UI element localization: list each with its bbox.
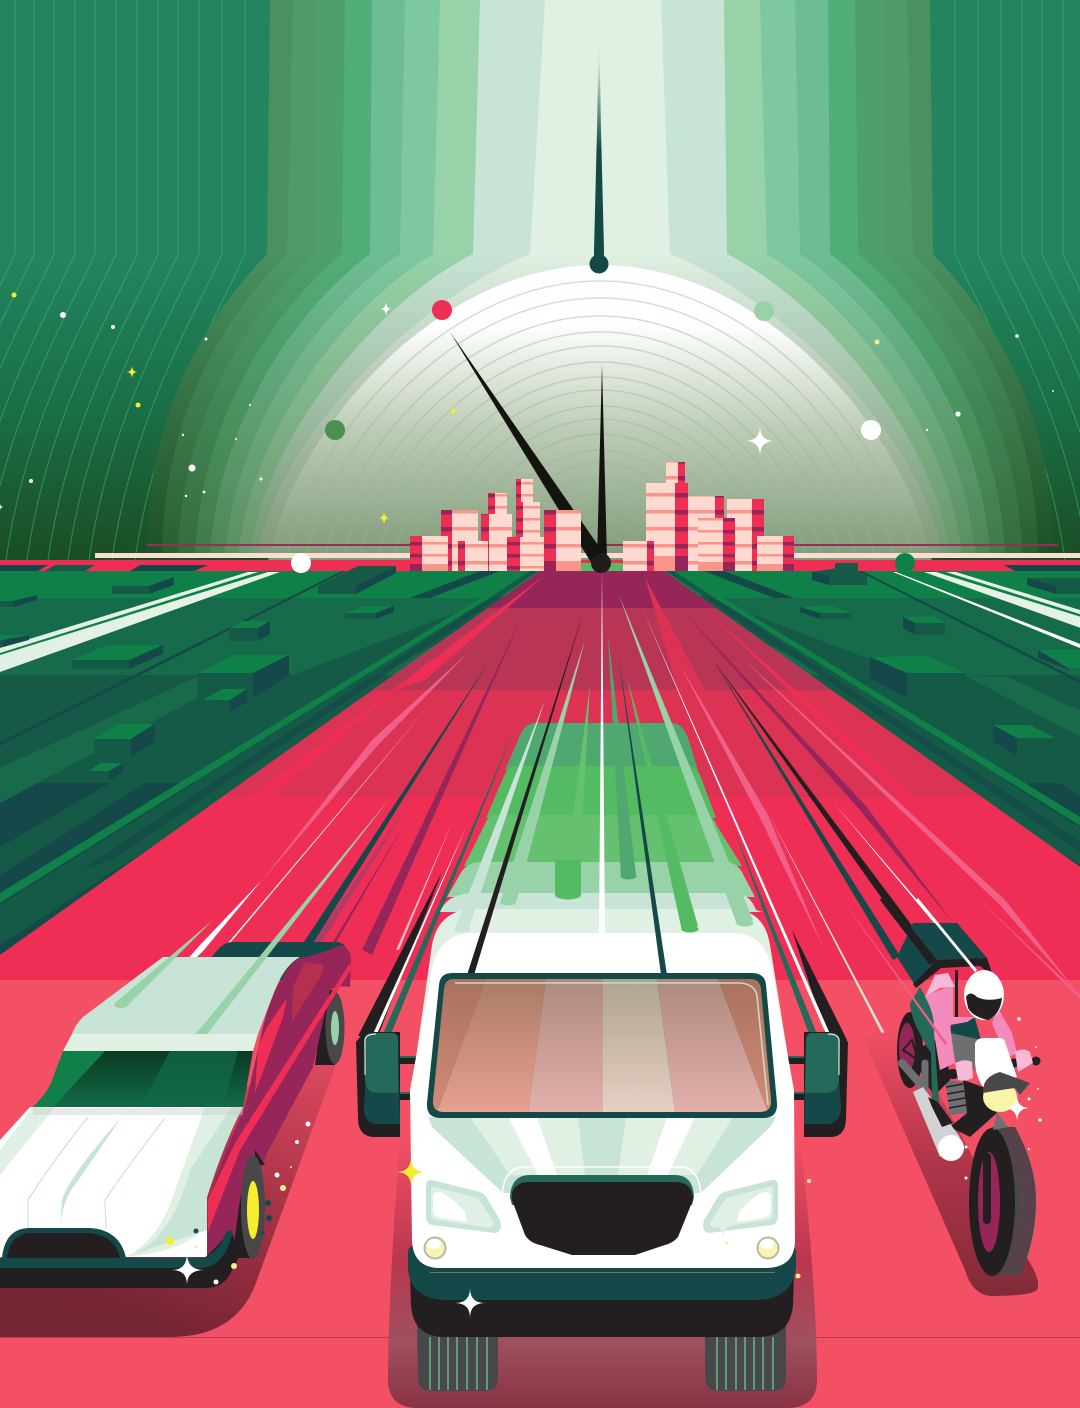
clock hands: [450, 332, 607, 564]
dial hub and side dots: [291, 553, 915, 573]
van wheels: [417, 1325, 786, 1391]
thin white line right: [893, 572, 1080, 648]
rider torso and arms: [925, 973, 1017, 1070]
van windshield: [427, 973, 777, 1118]
van headlights: [426, 1180, 778, 1233]
car side stripe: [208, 963, 351, 1232]
sky background with light rays: [0, 0, 1080, 572]
car roof streaks: [114, 798, 390, 1040]
thin sky lines right: [955, 0, 1080, 560]
car hood: [0, 1107, 243, 1257]
van roof streaks: [454, 595, 754, 932]
car roof band: [63, 1034, 258, 1051]
engine and frame: [915, 1018, 997, 1137]
buildings right: [623, 462, 794, 572]
rear wheel: [897, 1012, 923, 1088]
headlight: [983, 1072, 1030, 1112]
car roof: [72, 957, 300, 1034]
van fog lights: [424, 1236, 780, 1260]
horizon lines: [0, 544, 1080, 572]
van body: [410, 933, 795, 1268]
rider legs: [910, 987, 953, 1127]
ground right mirrored: [664, 571, 1080, 958]
dome with concentric rings: [268, 265, 932, 562]
car windshield: [33, 1051, 253, 1107]
car bumper: [0, 1230, 240, 1288]
car side body: [208, 945, 351, 1258]
car rear window: [292, 962, 323, 1022]
road depth bands: [222, 690, 982, 797]
van bumper: [408, 1246, 796, 1337]
ground blocks right: [800, 563, 1080, 755]
van shadow: [388, 1140, 817, 1408]
fork and fairing: [975, 1038, 1017, 1130]
van centre line and roof lines: [467, 571, 667, 975]
moto sparkles: [964, 1017, 1042, 1180]
car side window: [255, 998, 287, 1093]
sky specks and stars: [0, 292, 1054, 526]
motorcycle shadow: [862, 1030, 1038, 1296]
city skyline: [410, 462, 794, 572]
helmet: [964, 970, 1004, 1020]
hands and grips: [946, 1050, 1040, 1081]
nested light bands: [147, 0, 1053, 555]
van grille: [502, 1167, 701, 1255]
road: [0, 571, 1080, 1408]
car rear wheel: [315, 990, 344, 1065]
van sparkles: [396, 1157, 811, 1318]
thin sky lines left: [0, 0, 245, 560]
clock dial: top marker: [590, 10, 608, 274]
car grille: [2, 1228, 126, 1258]
luggage box: [897, 923, 992, 1017]
motorcycle and rider: [837, 892, 1042, 1276]
car sparks: [166, 1122, 310, 1285]
van: [356, 571, 848, 1391]
buildings left: [410, 479, 581, 572]
van hood rays: [428, 1117, 776, 1193]
clock dial dots: [325, 300, 881, 440]
car rear roof: [212, 942, 350, 980]
van mirrors and struts: [356, 1032, 848, 1137]
ground left with stripes: [0, 571, 540, 958]
exhaust pipes: [902, 1063, 964, 1161]
van rear layers: [410, 723, 795, 1100]
car front wheel: [232, 1150, 265, 1259]
front wheel: [969, 1127, 1036, 1276]
ground blocks left: [0, 566, 396, 780]
road speed streaks: [135, 575, 1080, 1092]
speed lines over moto: [837, 892, 977, 1045]
sports car: [0, 798, 390, 1288]
car shadow: [0, 1040, 345, 1337]
